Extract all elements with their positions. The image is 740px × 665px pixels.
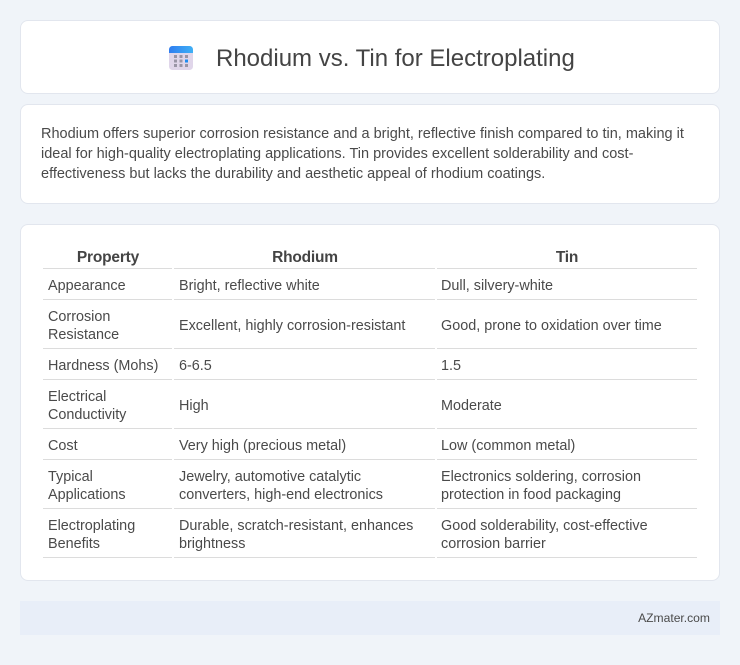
row: electrical conductivity: [48, 389, 502, 423]
intro text: [41, 126, 684, 182]
title: Rhodium vs. Tin for Electroplating: [216, 45, 575, 72]
row: appearance: Appearance: [48, 278, 126, 294]
footer source text: AZmater.com: [638, 611, 710, 625]
header row: Rhodium: [272, 249, 338, 266]
row: electrical conductivity: Electrical: [48, 389, 106, 405]
row: cost: Very high (precious metal): [179, 438, 346, 454]
row: electroplating benefits: Durable, scratch-resistant, enhances: [179, 518, 413, 534]
row: typical applications: [48, 469, 641, 503]
row: appearance: Dull, silvery-white: [441, 278, 553, 294]
footer: [20, 601, 720, 635]
row: electrical conductivity: Conductivity: [48, 407, 126, 423]
row: electroplating benefits: Good solderability, cost-effective: [441, 518, 648, 534]
row: electrical conductivity: High: [179, 398, 209, 414]
row: corrosion resistance: Corrosion: [48, 309, 110, 325]
row: cost: Low (common metal): [441, 438, 575, 454]
row: hardness: 6-6.5: [179, 358, 212, 374]
row: electroplating benefits: brightness: [179, 536, 245, 552]
row: hardness: 1.5: [441, 358, 461, 374]
row: electroplating benefits: Electroplating: [48, 518, 135, 534]
header row: [77, 249, 578, 266]
row: appearance: Bright, reflective white: [179, 278, 320, 294]
intro text: ideal for high-quality electroplating applications. Tin provides excellent solderability and cost-: [41, 146, 633, 162]
header row: Property: [77, 249, 139, 266]
row: hardness: [48, 358, 461, 374]
row: corrosion resistance: Excellent, highly corrosion-resistant: [179, 318, 405, 334]
row: corrosion resistance: Resistance: [48, 327, 119, 343]
row: typical applications: Applications: [48, 487, 126, 503]
row: electroplating benefits: Benefits: [48, 536, 100, 552]
intro text: effectiveness but lacks the durability and aesthetic appeal of rhodium coatings.: [41, 166, 545, 182]
row: electroplating benefits: corrosion barrier: [441, 536, 546, 552]
row: typical applications: protection in food packaging: [441, 487, 621, 503]
row: typical applications: Typical: [48, 469, 93, 485]
table card: [20, 224, 720, 581]
row: typical applications: Jewelry, automotive catalytic: [179, 469, 361, 485]
row: electroplating benefits: [48, 518, 648, 552]
row: hardness: Hardness (Mohs): [48, 358, 158, 374]
intro card: [20, 104, 720, 204]
intro text: Rhodium offers superior corrosion resistance and a bright, reflective finish compared to tin, making it: [41, 126, 684, 142]
row: appearance: [48, 278, 553, 294]
row: typical applications: converters, high-end electronics: [179, 487, 383, 503]
header row: Tin: [556, 249, 578, 266]
row: corrosion resistance: Good, prone to oxidation over time: [441, 318, 662, 334]
row: corrosion resistance: [48, 309, 662, 343]
row: electrical conductivity: Moderate: [441, 398, 502, 414]
icon: calendar: [169, 46, 193, 70]
title card: [20, 20, 720, 94]
row: typical applications: Electronics soldering, corrosion: [441, 469, 641, 485]
row: cost: Cost: [48, 438, 78, 454]
row: cost: [48, 438, 575, 454]
